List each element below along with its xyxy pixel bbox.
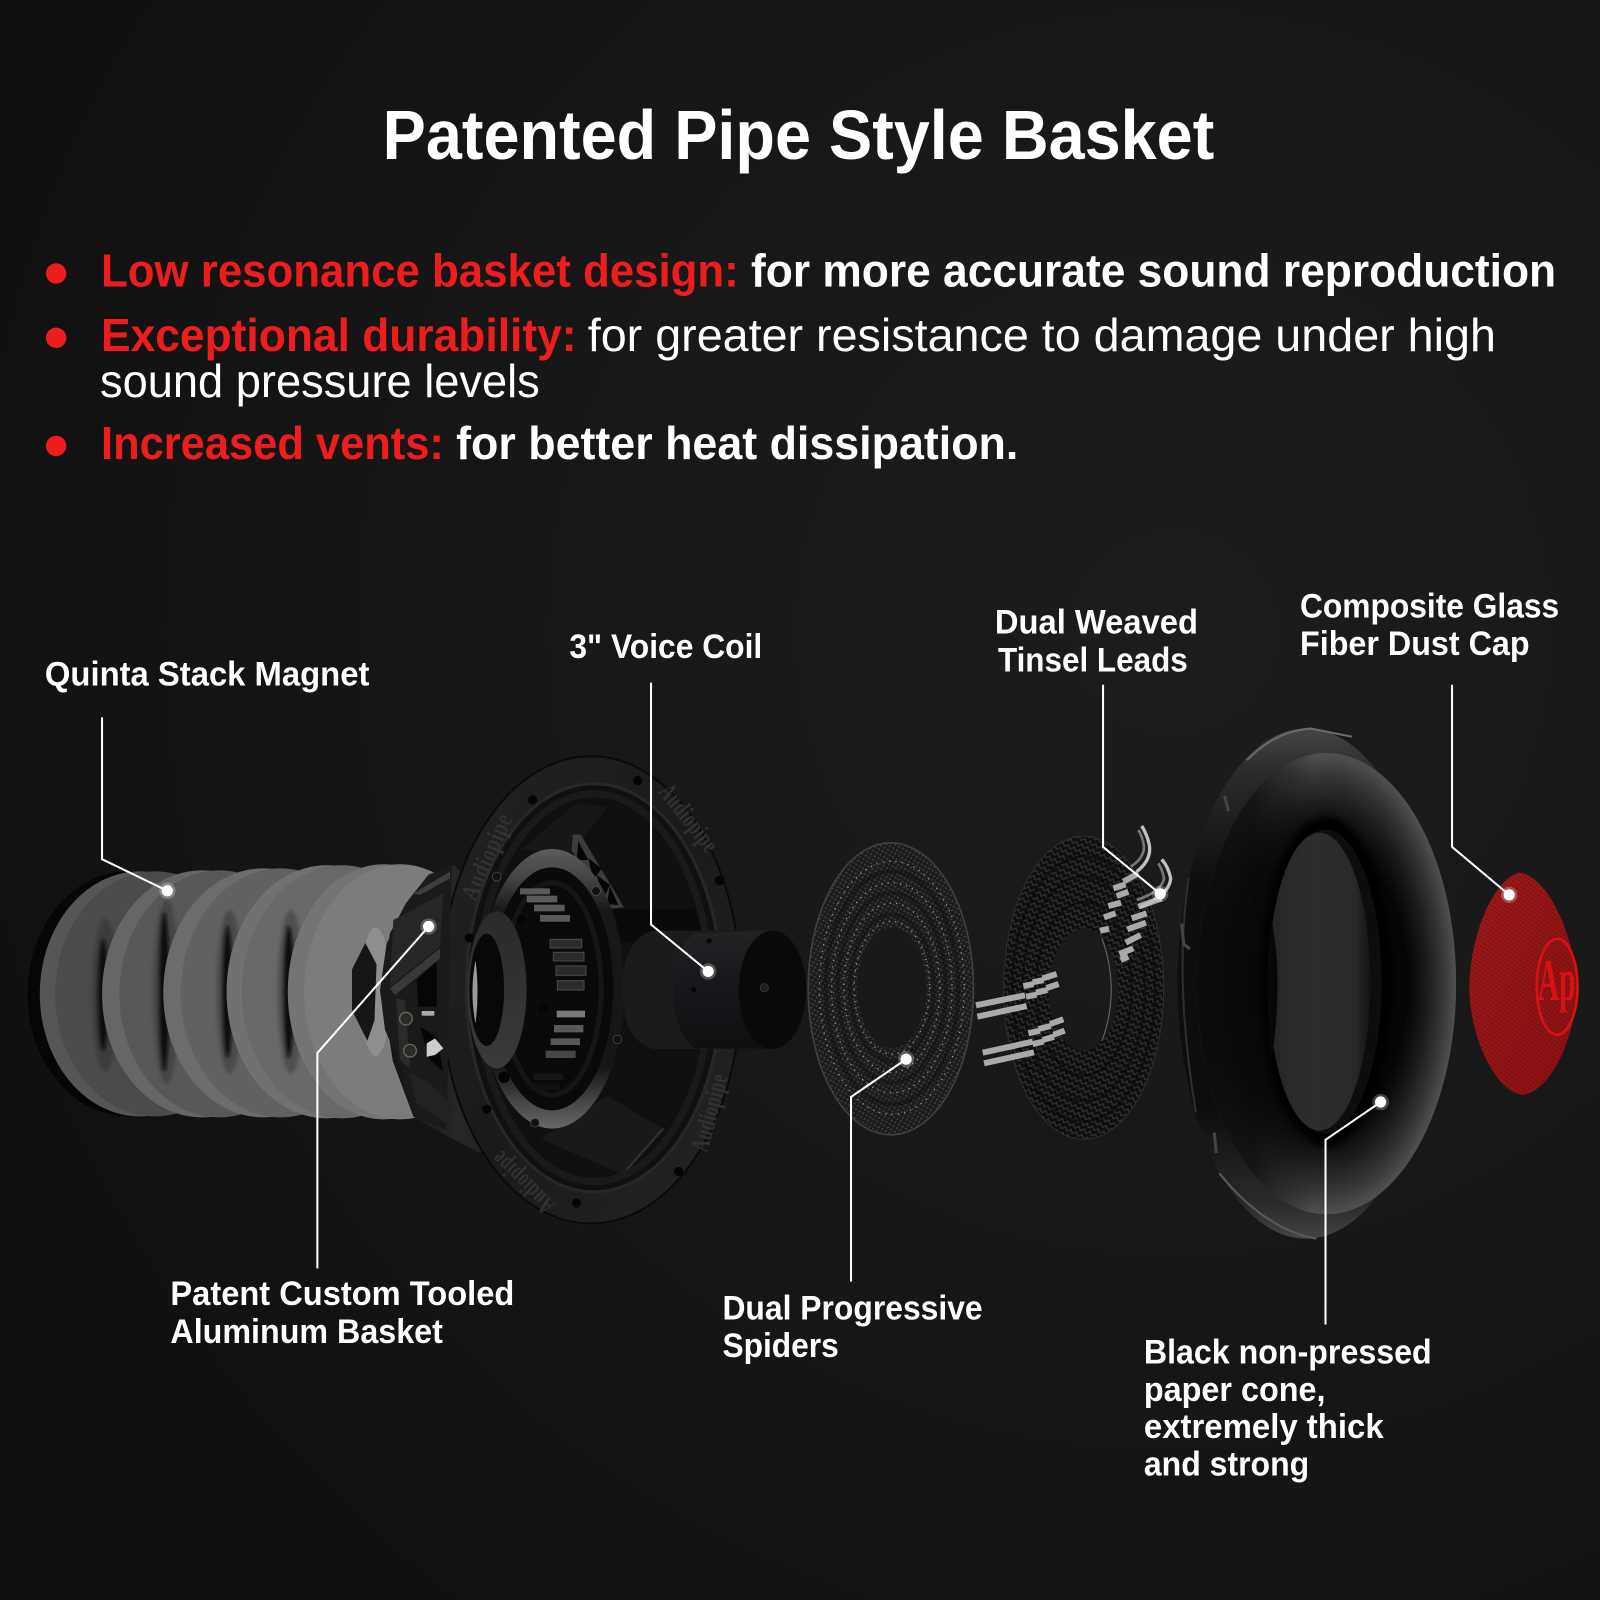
- brand text on basket flange: Audiopipe: [653, 778, 725, 858]
- label: dual weaved tinsel leads: Tinsel Leads: [998, 641, 1188, 679]
- label: dual progressive spiders: Spiders: [722, 1327, 839, 1365]
- voice coil: [622, 931, 806, 1049]
- exploded speaker diagram: [28, 729, 1578, 1239]
- label: dual progressive spiders: [722, 1289, 983, 1365]
- magnet stack: [28, 864, 496, 1119]
- leader: tinsel leads: [1103, 685, 1168, 902]
- title: Patented Pipe Style Basket: [383, 96, 1214, 174]
- leader: dust cap: [1452, 685, 1517, 903]
- bullet: exceptional durability: for greater resistance to damage under high: [588, 309, 1496, 361]
- label: dual progressive spiders: Dual Progressive: [722, 1289, 983, 1327]
- second spider with chevron weave: [1003, 836, 1164, 1140]
- label: composite glass fiber dust cap: [1300, 587, 1559, 663]
- bullet: low resonance: for more accurate sound reproduction: [751, 245, 1556, 297]
- label: quinta stack magnet: Quinta Stack Magnet: [45, 656, 370, 694]
- brand text on basket flange: Audiopipe: [685, 1070, 734, 1155]
- leader: spiders: [851, 1051, 914, 1282]
- leader: voice coil: [651, 683, 716, 980]
- leader: aluminum basket: [317, 918, 437, 1268]
- label: voice coil: 3" Voice Coil: [569, 628, 762, 666]
- bullet: exceptional durability: sound pressure levels: [100, 355, 540, 407]
- label: composite glass fiber dust cap: Fiber Dust Cap: [1300, 625, 1530, 663]
- label: black non-pressed paper cone: [1144, 1333, 1432, 1484]
- label: black non-pressed paper cone: extremely thick: [1144, 1408, 1384, 1446]
- tinsel leads: [976, 826, 1171, 1063]
- bullet: low resonance: [46, 245, 1556, 297]
- brand text on basket flange: [454, 778, 734, 1220]
- label: black non-pressed paper cone: paper cone,: [1144, 1371, 1326, 1409]
- bullet: increased vents: for better heat dissipation.: [456, 417, 1018, 469]
- bullet: increased vents: Increased vents:: [101, 417, 444, 469]
- label: patent custom tooled aluminum basket: Patent Custom Tooled: [170, 1275, 514, 1313]
- leader: paper cone: [1326, 1094, 1389, 1324]
- label: patent custom tooled aluminum basket: [170, 1275, 514, 1351]
- composite glass fiber dust cap: Ap: [1538, 948, 1576, 1014]
- bullet: exceptional durability: Exceptional durability:: [101, 309, 577, 361]
- bullet: increased vents: [46, 417, 1018, 469]
- feature list: [46, 245, 1556, 469]
- label: dual weaved tinsel leads: [995, 604, 1198, 679]
- composite glass fiber dust cap: [1469, 872, 1578, 1095]
- bullet: low resonance: Low resonance basket design:: [101, 245, 739, 297]
- aluminum basket: [380, 755, 742, 1224]
- dual progressive spider: [807, 842, 974, 1136]
- label: patent custom tooled aluminum basket: Aluminum Basket: [170, 1313, 443, 1351]
- basket flange ring: [440, 755, 742, 1224]
- motor ring, vents, terminals and truss: [380, 835, 624, 1130]
- brand text on basket flange: Audiopipe: [485, 1145, 560, 1220]
- leader: quinta stack magnet: [102, 717, 176, 899]
- label: black non-pressed paper cone: Black non-pressed: [1144, 1333, 1432, 1371]
- paper cone and surround: [1178, 729, 1456, 1239]
- brand text on basket flange: Audiopipe: [454, 809, 518, 904]
- label: dual weaved tinsel leads: Dual Weaved: [995, 604, 1198, 642]
- label: black non-pressed paper cone: and strong: [1144, 1446, 1309, 1484]
- label: composite glass fiber dust cap: Composite Glass: [1300, 587, 1559, 625]
- bullet: exceptional durability: [46, 309, 1496, 407]
